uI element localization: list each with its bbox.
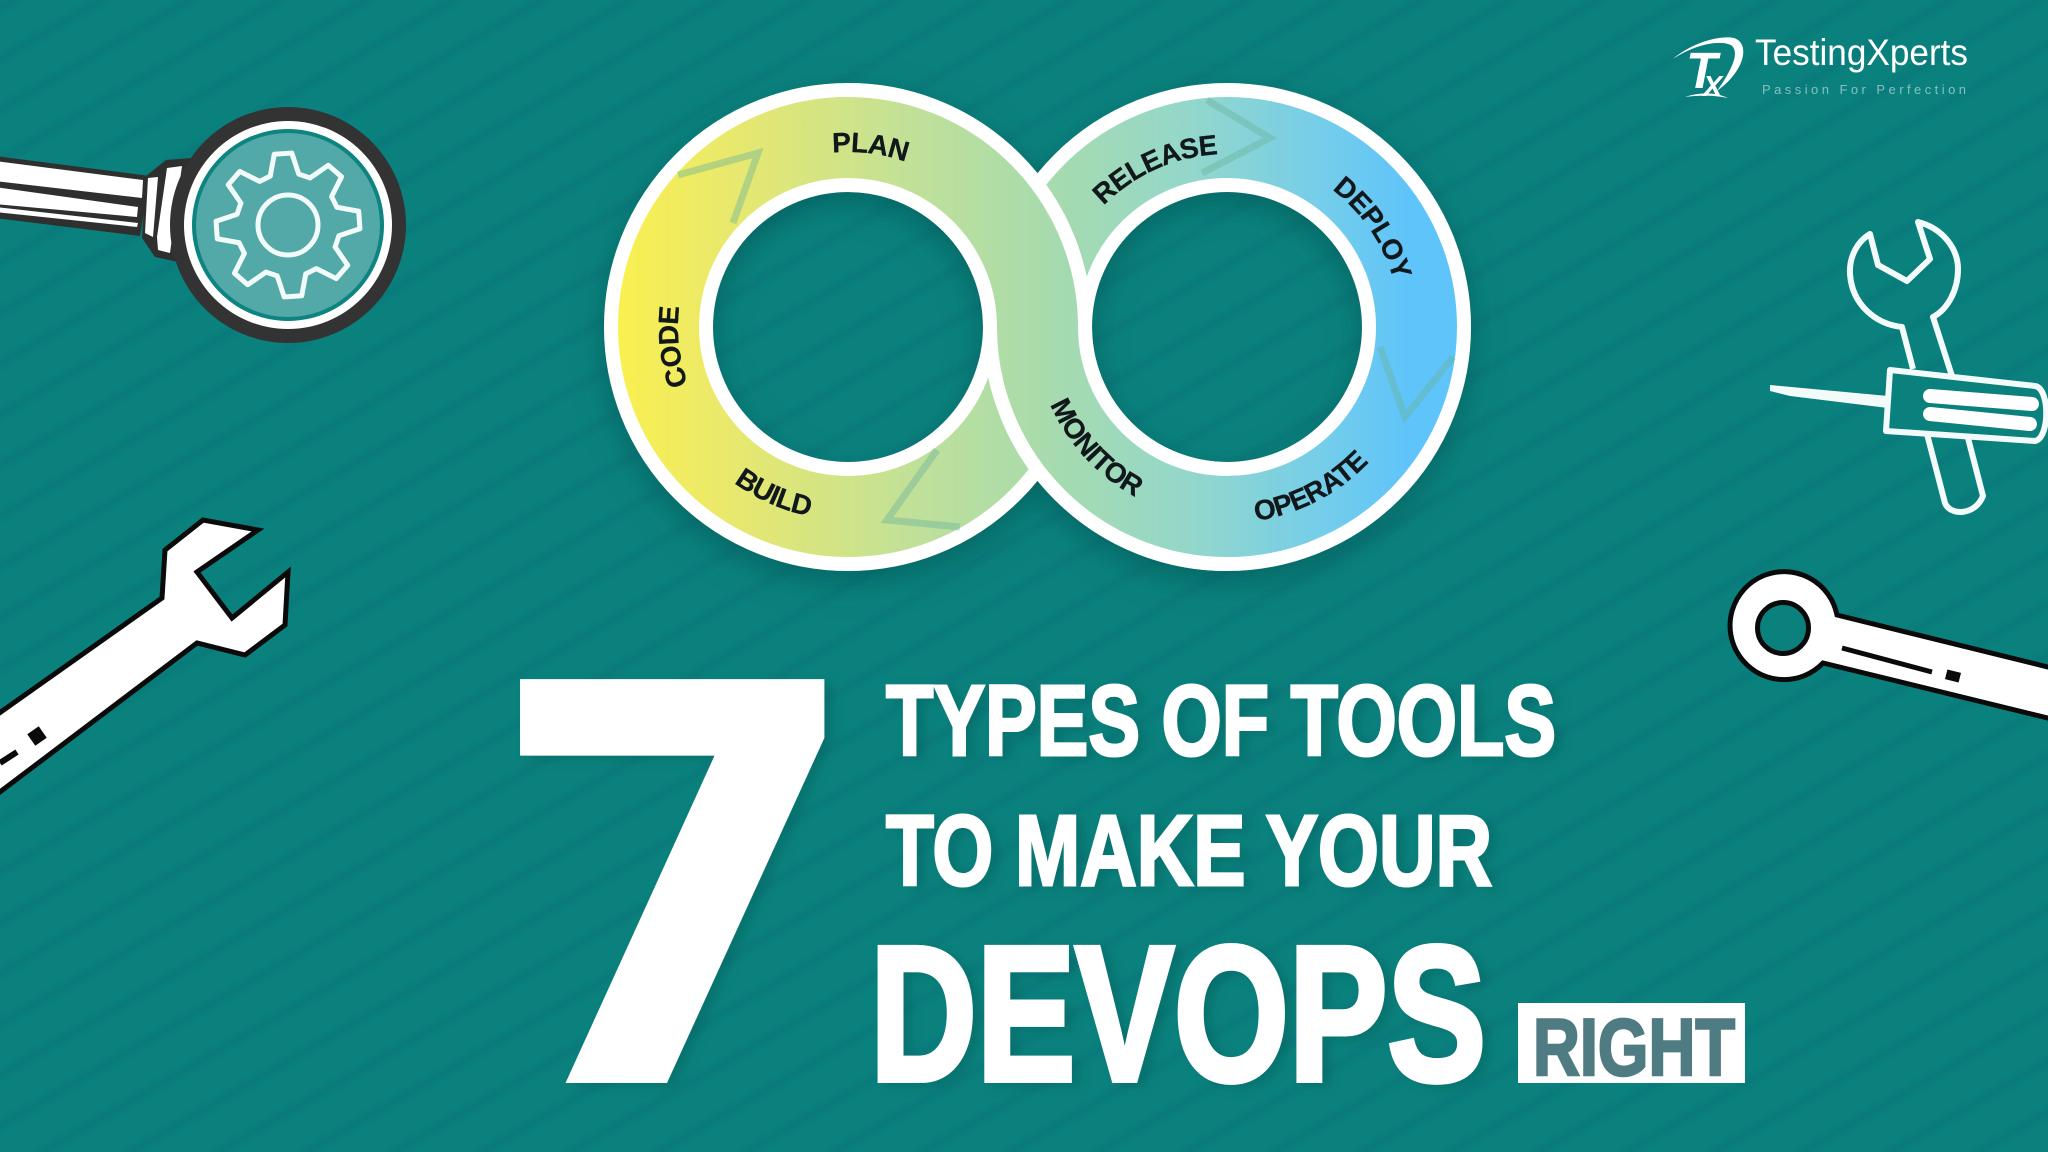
- logo wordmark: TestingXperts: [1755, 32, 1968, 73]
- icon: ring spanner right: [1730, 572, 2048, 721]
- label: MONITOR: MONITOR: [1050, 397, 1142, 497]
- logo: TestingXperts: [1673, 32, 1968, 103]
- RIGHT badge: RIGHT: [1533, 1003, 1735, 1093]
- label: CODE: CODE: [658, 306, 686, 387]
- label: PLAN: PLAN: [834, 132, 910, 162]
- label: OPERATE: OPERATE: [1254, 449, 1368, 520]
- icon: wrench bottom left: [0, 520, 288, 801]
- gear dial: [170, 107, 406, 343]
- wrench outline: [1850, 222, 1983, 512]
- screwdriver blade: [1770, 385, 1888, 408]
- icon: gear spanner top left: [0, 107, 406, 343]
- logo mark: T: [1686, 42, 1721, 99]
- headline DEVOPS: DEVOPS: [870, 906, 1486, 1121]
- logo mark: X: [1701, 71, 1724, 103]
- label: DEPLOY: DEPLOY: [1333, 176, 1412, 274]
- flow arrow chevrons: [678, 100, 1453, 527]
- icon: wrench and screwdriver outline: [1770, 222, 2046, 512]
- logo tagline: Passion For Perfection: [1762, 82, 1966, 97]
- loop ring shapes: [658, 100, 1453, 527]
- label: RELEASE: RELEASE: [1092, 134, 1218, 204]
- title block: [483, 569, 1556, 1152]
- spanner handle: [0, 156, 192, 262]
- headline line 2: TO MAKE YOUR: [886, 795, 1492, 907]
- screwdriver handle: [1886, 370, 2046, 441]
- infinity loop diagram: [609, 83, 1479, 576]
- label: BUILD: BUILD: [735, 468, 812, 514]
- logo mark: [1673, 37, 1743, 103]
- headline line 1: TYPES OF TOOLS: [886, 665, 1556, 777]
